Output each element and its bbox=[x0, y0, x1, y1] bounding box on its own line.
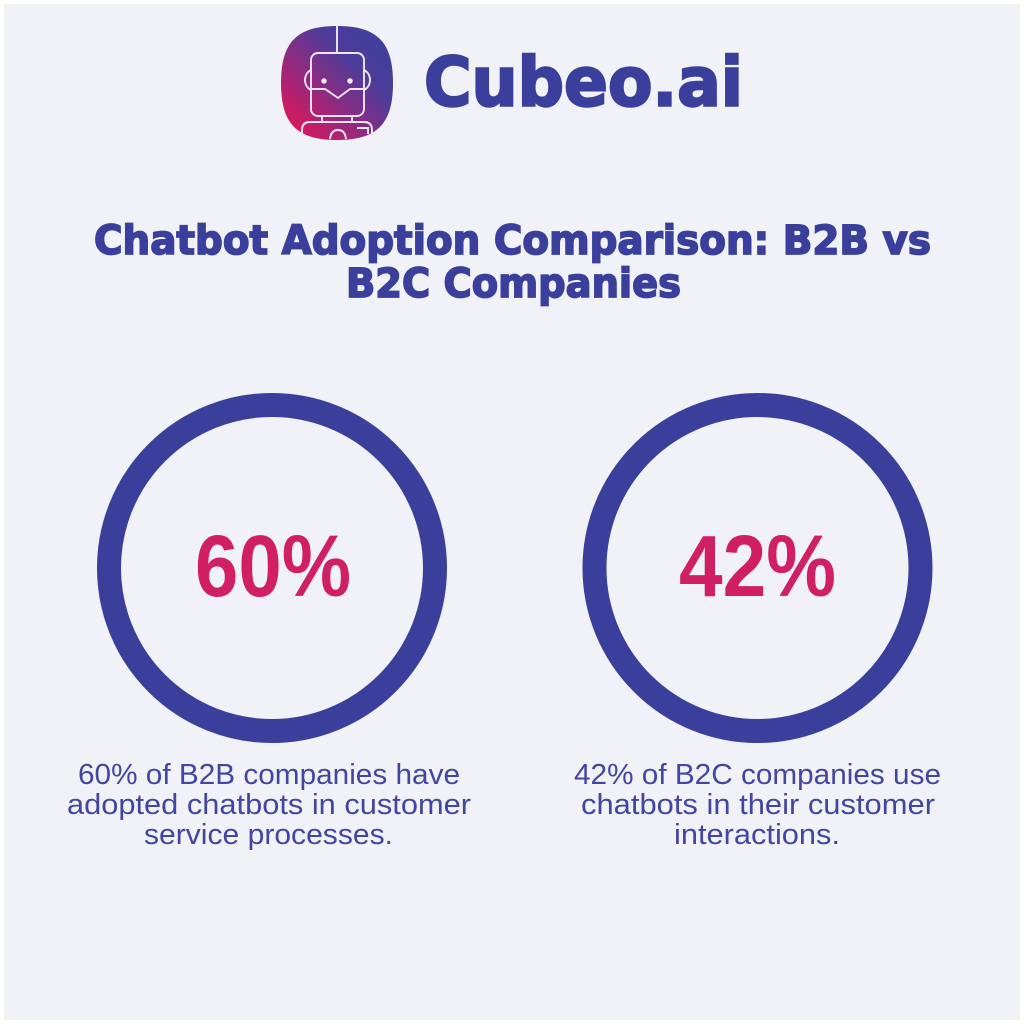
value: 42%: 42% bbox=[679, 518, 836, 615]
icon: robot bbox=[281, 26, 393, 140]
description: B2B: adopted chatbots in customer bbox=[67, 789, 471, 821]
value: 60%: 60% bbox=[195, 518, 351, 615]
stat: B2C bbox=[574, 405, 941, 851]
ring: 42% bbox=[594, 405, 920, 731]
description: B2C: interactions. bbox=[674, 819, 840, 851]
description: B2B: 60% of B2B companies have bbox=[78, 759, 460, 791]
wordmark: Cubeo.ai bbox=[424, 44, 743, 122]
description: B2C: 42% of B2C companies use bbox=[574, 759, 941, 791]
description: B2B bbox=[67, 759, 471, 851]
title bbox=[94, 218, 931, 307]
logo bbox=[281, 26, 743, 140]
ring: 60% bbox=[109, 405, 435, 731]
description: B2C bbox=[574, 759, 941, 851]
description: B2B: service processes. bbox=[144, 819, 393, 851]
stat: B2B bbox=[67, 405, 471, 851]
title: B2C Companies bbox=[346, 261, 681, 307]
title: Chatbot Adoption Comparison: B2B vs bbox=[94, 218, 931, 264]
description: B2C: chatbots in their customer bbox=[581, 789, 935, 821]
